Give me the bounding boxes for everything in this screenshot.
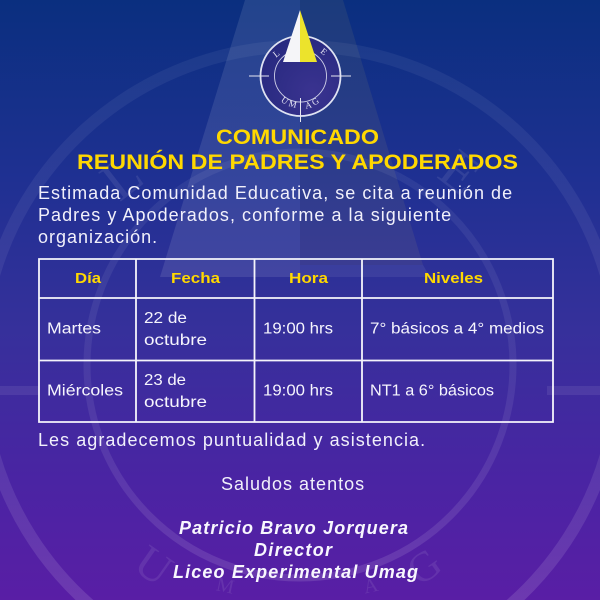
row: martes: 22 de [144,310,187,327]
table header: Niveles [424,270,483,287]
table header: Día [75,270,102,287]
logo: school crest [249,10,351,122]
logo: school crest: A [304,99,313,111]
title: REUNIÓN DE PADRES Y APODERADOS [77,150,518,174]
signature: Patricio Bravo Jorquera [179,518,408,538]
logo: school crest: U [279,95,291,107]
row: miércoles: Miércoles [47,382,123,400]
row: miércoles: 23 de [144,372,186,389]
closing text: Les agradecemos puntualidad y asistencia. [38,430,426,450]
signature: Liceo Experimental Umag [173,562,418,582]
row: miércoles: 19:00 hrs [263,382,333,400]
logo: school crest: M [288,98,298,110]
table header [75,270,483,287]
row: martes: octubre [144,332,207,349]
title [77,126,518,174]
watermark: large school crest: A [361,574,381,598]
greeting: Saludos atentos [221,474,365,494]
row: martes [47,310,544,349]
intro text: Estimada Comunidad Educativa, se cita a reunión de [38,183,513,203]
intro text: Padres y Apoderados, conforme a la siguiente [38,205,452,225]
row: martes: 19:00 hrs [263,320,333,338]
logo: school crest: L [271,48,281,59]
title: COMUNICADO [216,126,379,149]
row: martes: Martes [47,320,101,338]
schedule table [39,259,553,422]
table header: Fecha [171,270,221,287]
intro text: organización. [38,227,158,247]
row: miércoles [47,372,494,411]
row: miércoles: octubre [144,394,207,411]
watermark: large school crest: U [126,535,182,596]
signature [173,518,418,582]
intro text [38,183,513,247]
watermark: large school crest: M [214,574,236,599]
watermark: large school crest: L [89,143,154,213]
signature: Director [254,540,333,560]
watermark: large school crest: G [399,540,450,595]
row: miércoles: NT1 a 6° básicos [370,382,494,400]
logo: school crest: G [310,95,321,108]
logo: school crest: E [319,46,329,58]
row: martes: 7° básicos a 4° medios [370,320,544,338]
table header: Hora [289,270,329,287]
watermark: large school crest: E [428,138,493,208]
